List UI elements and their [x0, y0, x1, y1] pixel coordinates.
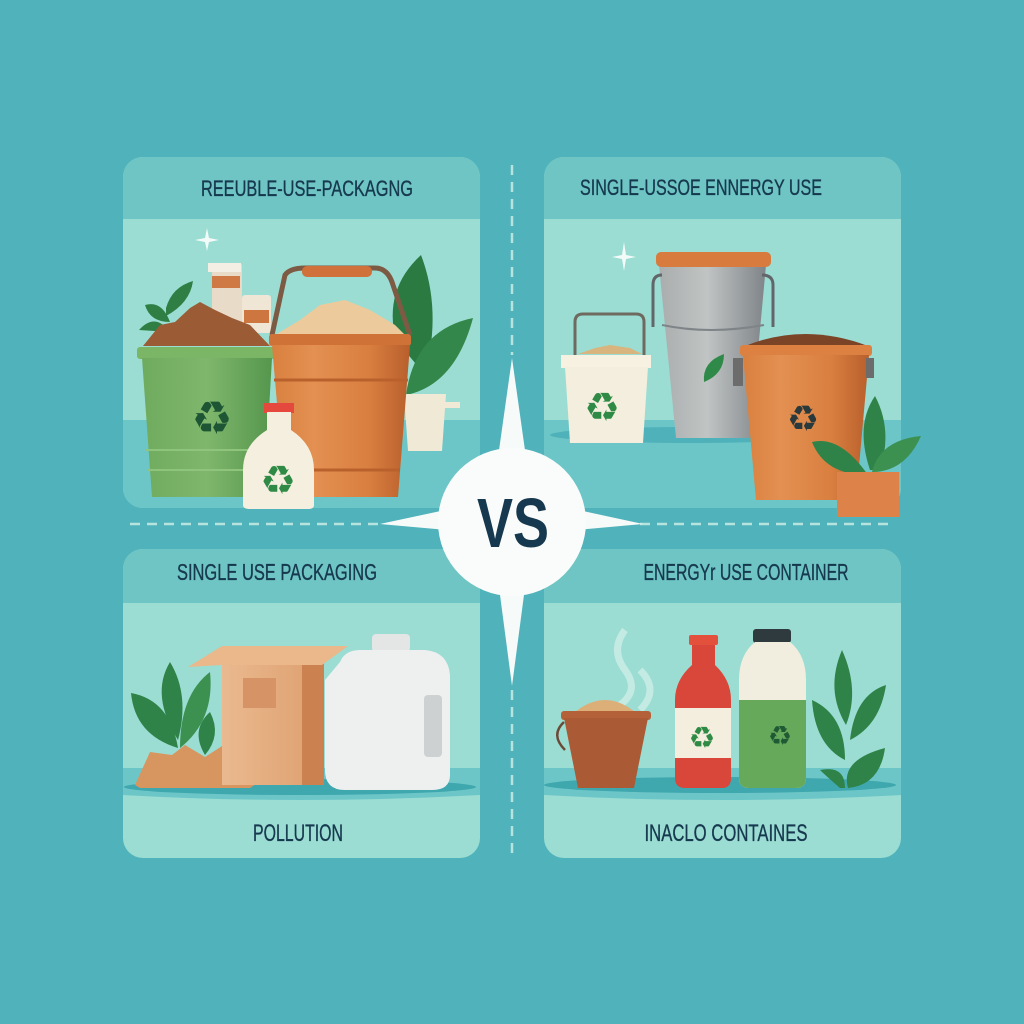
icon: potted plant — [812, 396, 921, 517]
icon: white recycling tub: ♻ — [584, 386, 620, 430]
icon: large leaves right — [393, 255, 473, 395]
text: invalid containers: INACLO CONTAINES — [644, 820, 808, 847]
icon: white recycling bottle: ♻ — [260, 459, 296, 503]
icon: white recycling tub — [561, 314, 651, 443]
icon: white cup — [404, 394, 460, 451]
icon: rocks — [135, 745, 265, 788]
VS text: VS — [477, 484, 549, 562]
icon: white recycling bottle — [243, 403, 314, 509]
heading: single-use energy: SINGLE-USSOE ENNERGY USE — [580, 175, 822, 200]
icon: red bottle: ♻ — [689, 722, 715, 755]
panel: single use packaging — [123, 549, 480, 858]
panel: reusable packaging — [123, 157, 480, 509]
icon: leaves — [131, 662, 215, 755]
icon: steam — [618, 630, 650, 710]
dashed divider horizontal — [130, 523, 895, 525]
icon: green bottle — [739, 629, 806, 788]
icon: small jars — [208, 263, 271, 333]
icon: plant — [812, 650, 886, 788]
icon: green recycling bin — [137, 302, 275, 497]
icon: orange bucket — [269, 266, 411, 497]
dashed divider vertical — [511, 165, 513, 860]
heading: reusable packaging: REEUBLE-USE-PACKAGNG — [201, 176, 413, 201]
text: pollution: POLLUTION — [253, 820, 343, 847]
panel: energy use container — [544, 549, 901, 858]
heading: energy use container: ENERGYr USE CONTAINER — [644, 559, 848, 585]
heading: single use packaging: SINGLE USE PACKAGING — [177, 559, 377, 585]
icon: terracotta bucket — [557, 700, 651, 788]
icon: orange recycling barrel: ♻ — [787, 398, 819, 439]
panel: single-use energy — [544, 157, 921, 517]
icon: cardboard box — [188, 646, 348, 785]
icon: steel bucket — [653, 252, 773, 438]
icon: green bottle: ♻ — [768, 721, 792, 751]
icon: green recycling bin: ♻ — [191, 392, 233, 444]
icon: red bottle — [675, 635, 731, 788]
icon: sparkle — [195, 228, 219, 251]
icon: plastic jug — [325, 634, 450, 790]
icon: sparkle — [612, 242, 636, 271]
icon: leaves behind green bin — [139, 281, 193, 332]
VS badge — [380, 358, 643, 686]
icon: orange recycling barrel — [733, 334, 874, 500]
four point star — [380, 358, 643, 686]
